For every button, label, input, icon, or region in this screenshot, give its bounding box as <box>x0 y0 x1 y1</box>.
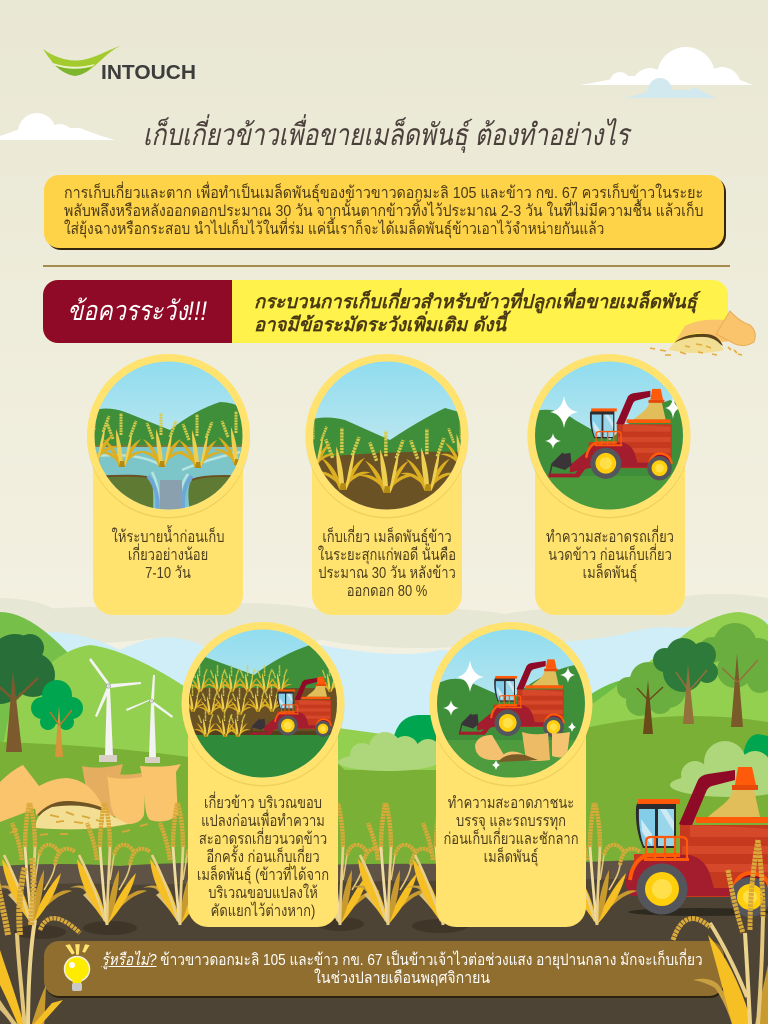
large harvester <box>626 767 768 917</box>
intro panel: การเก็บเกี่ยวและตาก เพื่อทำเป็นเมล็ดพันธุ์ของข้าวขาวดอกมะลิ 105 และข้าว กข. 67 ควรเก็บข้าวในระยะ <box>64 185 703 202</box>
intro panel <box>44 175 724 248</box>
bush: dark green centre <box>393 715 440 760</box>
card 4: แปลงก่อนเพื่อทำความ <box>201 813 325 830</box>
circle 5: clean containers and truck <box>430 622 592 786</box>
pale clouds <box>0 594 768 658</box>
card 3 <box>535 435 685 615</box>
warning text: กระบวนการเก็บเกี่ยวสำหรับข้าวที่ปลูกเพื่อขายเมล็ดพันธุ์ <box>254 292 697 313</box>
intro panel: ใส่ยุ้งฉางหรือกระสอบ นำไปเก็บไว้ในที่ร่ม แค่นี้เราก็จะได้เมล็ดพันธุ์ข้าวเอาไว้จำหน่ายกันแล้ว <box>64 221 604 238</box>
intro panel: พลับพลึงหรือหลังออกดอกประมาณ 30 วัน จากนั้นตากข้าวทิ้งไว้ประมาณ 2-3 วัน ในที่ไม่มีความชื้น แล้วเก็บ <box>64 203 703 220</box>
warning label <box>43 280 232 343</box>
hill: centre strip <box>338 728 440 790</box>
did you know text: ในช่วงปลายเดือนพฤศจิกายน <box>314 970 490 987</box>
cloud: left white <box>0 113 114 140</box>
tree: large left <box>0 634 55 752</box>
soil <box>0 860 768 1024</box>
divider <box>43 265 730 267</box>
warning label: ข้อควรระวัง!!! <box>68 296 207 326</box>
card 4: สะอาดรถเกี่ยวนวดข้าว <box>199 831 327 848</box>
bush: right <box>670 741 768 797</box>
card 5: เมล็ดพันธุ์ <box>484 849 538 866</box>
card 4: คัดแยกไว้ต่างหาก) <box>211 903 315 920</box>
icon: spilled rice sack <box>650 310 756 356</box>
rice plant: large right <box>673 840 768 1024</box>
cloud: top right blue <box>624 78 716 98</box>
rice plant: large left <box>0 858 80 1024</box>
card 3: ทำความสะอาดรถเกี่ยว <box>546 529 674 546</box>
warning banner <box>43 280 728 343</box>
card 3: นวดข้าว ก่อนเก็บเกี่ยว <box>548 547 672 564</box>
bush: centre <box>338 732 441 771</box>
warning text <box>254 288 701 336</box>
logo <box>43 46 196 84</box>
logo wordmark: INTOUCH <box>101 62 196 84</box>
warning text: อาจมีข้อระมัดระวังเพิ่มเติม ดังนี้ <box>254 315 506 336</box>
did you know text <box>101 948 703 987</box>
circle 3: clean harvester <box>528 354 690 520</box>
icon: light bulb <box>64 944 90 991</box>
grain sacks and spilled rice <box>0 764 181 835</box>
hill: far left <box>0 612 110 760</box>
card 5 <box>436 703 586 927</box>
tree: small left <box>31 680 83 757</box>
card 5: บรรจุ และรถบรรทุก <box>456 813 566 830</box>
wind turbine 2 <box>126 675 173 763</box>
tree: right group <box>617 623 768 734</box>
card 5: ทำความสะอาดภาชนะ <box>448 795 574 812</box>
card 1 <box>93 435 243 615</box>
hill: right <box>570 612 768 770</box>
card 2: เก็บเกี่ยว เมล็ดพันธุ์ข้าว <box>322 529 452 546</box>
card 3: เมล็ดพันธุ์ <box>583 565 637 582</box>
hill: small right <box>560 678 720 760</box>
wind turbine 1 <box>89 658 141 762</box>
card 4: บริเวณขอบแปลงให้ <box>208 885 318 902</box>
cloud: top right white <box>580 47 752 85</box>
card 2: ออกดอก 80 % <box>347 583 427 600</box>
card 1: 7-10 วัน <box>145 565 191 582</box>
blue sky band <box>0 620 768 800</box>
card 2: ในระยะสุกแก่พอดี นั่นคือ <box>318 547 456 564</box>
card 2 <box>312 435 462 615</box>
card 1: ให้ระบายน้ำก่อนเก็บ <box>111 529 225 546</box>
card 2: ประมาณ 30 วัน หลังข้าว <box>318 565 456 582</box>
illustration circles <box>87 354 690 786</box>
card 4: เมล็ดพันธุ์ (ข้าวที่ได้จาก <box>197 867 329 884</box>
hill: left <box>0 645 260 760</box>
card 4: อีกครั้ง ก่อนเก็บเกี่ยว <box>206 849 320 866</box>
circle 1: drained water field <box>87 354 250 518</box>
plant shadows <box>14 917 468 939</box>
card 1: เกี่ยวอย่างน้อย <box>128 547 208 564</box>
title: เก็บเกี่ยวข้าวเพื่อขายเมล็ดพันธุ์ ต้องทำอย่างไร <box>143 119 629 152</box>
card 4 <box>188 703 338 927</box>
card 5: ก่อนเก็บเกี่ยวและชักลาก <box>443 831 579 848</box>
card 4: เกี่ยวข้าว บริเวณขอบ <box>204 795 322 812</box>
circle 2: ripe rice on dry soil <box>306 354 468 518</box>
bush: dark green right <box>743 734 768 762</box>
logo swoosh <box>43 46 120 76</box>
ground <box>0 716 768 880</box>
did you know bar <box>44 941 724 996</box>
did you know text: รู้หรือไม่? ข้าวขาวดอกมะลิ 105 และข้าว กข. 67 เป็นข้าวเจ้าไวต่อช่วงแสง อายุปานกลาง มักจะเก็บเกี่ยว <box>101 952 703 969</box>
harvester wheel shadow <box>628 908 768 916</box>
rice plants <box>0 803 640 925</box>
circle 4: harvesting field edge <box>181 622 345 786</box>
